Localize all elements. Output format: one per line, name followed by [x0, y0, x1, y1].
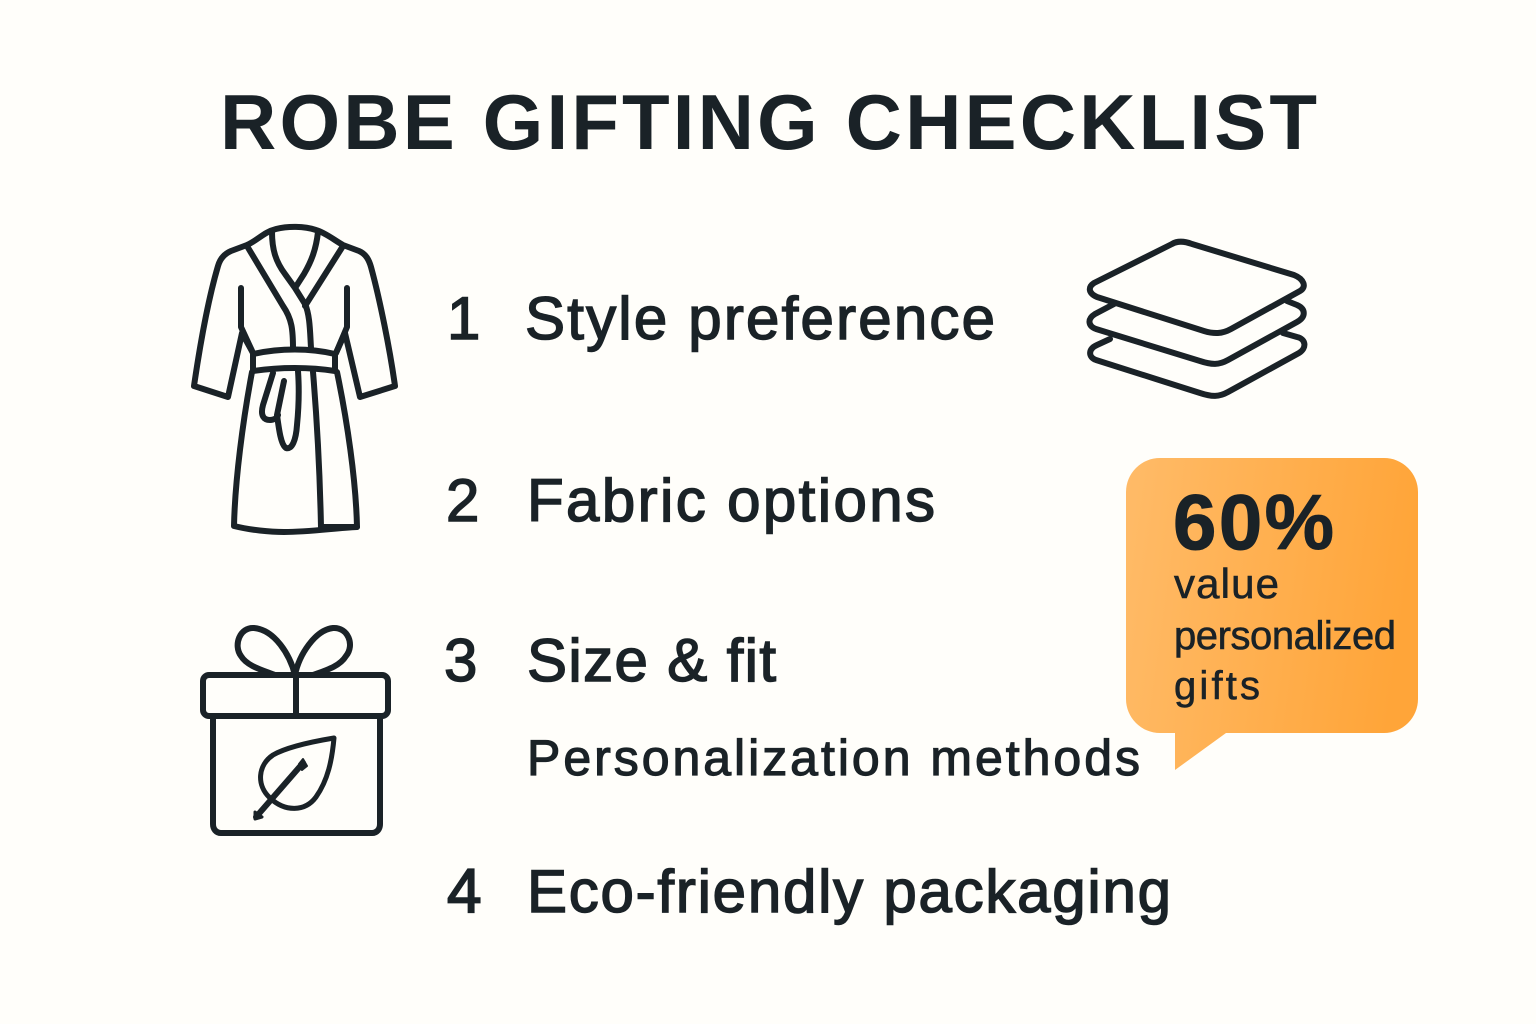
statistic caption: value [1174, 560, 1279, 607]
checklist item 2: Fabric options [527, 467, 935, 534]
icon: folded fabric layers [1089, 242, 1304, 396]
checklist item 3: Size & fit [527, 627, 776, 694]
checklist item 1: 1 [447, 285, 480, 352]
statistic caption: personalized [1174, 614, 1396, 658]
checklist item 1: Style preference [525, 285, 995, 352]
checklist item 4: Eco-friendly packaging [527, 858, 1171, 925]
statistic caption: gifts [1174, 664, 1260, 708]
icon: robe [194, 227, 395, 532]
statistic: 60% [1173, 478, 1334, 566]
statistic caption [1174, 560, 1396, 708]
speech bubble [1126, 458, 1418, 770]
checklist item 3: 3 [444, 627, 477, 694]
title: ROBE GIFTING CHECKLIST [220, 78, 1317, 166]
icon: eco gift box [203, 628, 388, 833]
personalization methods line: Personalization methods [527, 730, 1140, 786]
callout: 60 percent [1126, 458, 1418, 770]
checklist item 2: 2 [446, 467, 479, 534]
checklist item 4: 4 [447, 857, 481, 926]
